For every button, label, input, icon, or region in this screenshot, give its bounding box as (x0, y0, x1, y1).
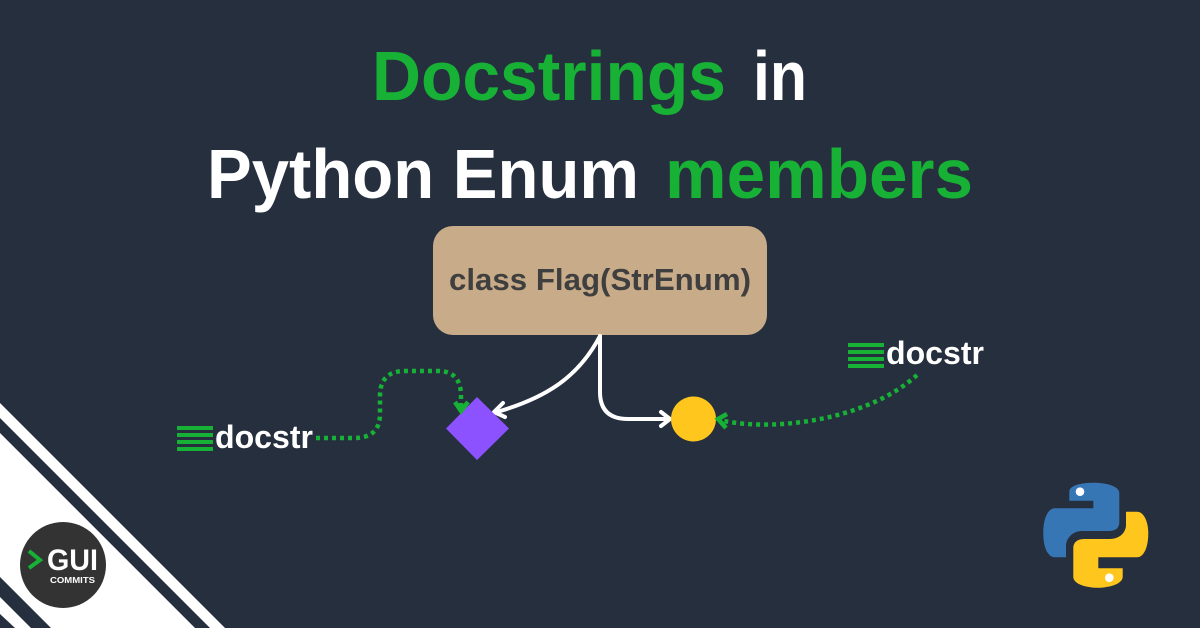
corner diagonal stripes (0, 403, 225, 628)
title: members (665, 135, 973, 213)
title: Docstrings (372, 37, 726, 115)
arrow: class to circle member (600, 336, 670, 426)
docstr label left: docstr (215, 419, 313, 455)
class box (433, 226, 767, 335)
class box: class Flag(StrEnum) (449, 262, 751, 297)
title: in (753, 37, 807, 115)
title: Python Enum (207, 135, 639, 213)
dotted arrow: right docstr to circle (718, 375, 917, 428)
icon: Python logo (1043, 483, 1148, 588)
circle member (671, 396, 716, 442)
logo: GUI Commits (20, 522, 106, 608)
title (207, 37, 973, 213)
logo: GUI Commits: GUI (47, 544, 98, 577)
diamond member (446, 397, 509, 460)
docstr label right: docstr (886, 335, 984, 371)
arrow: class to diamond member (494, 336, 600, 417)
logo: GUI Commits: COMMITS (50, 576, 96, 585)
dotted arrow: left docstr to diamond (316, 371, 468, 438)
